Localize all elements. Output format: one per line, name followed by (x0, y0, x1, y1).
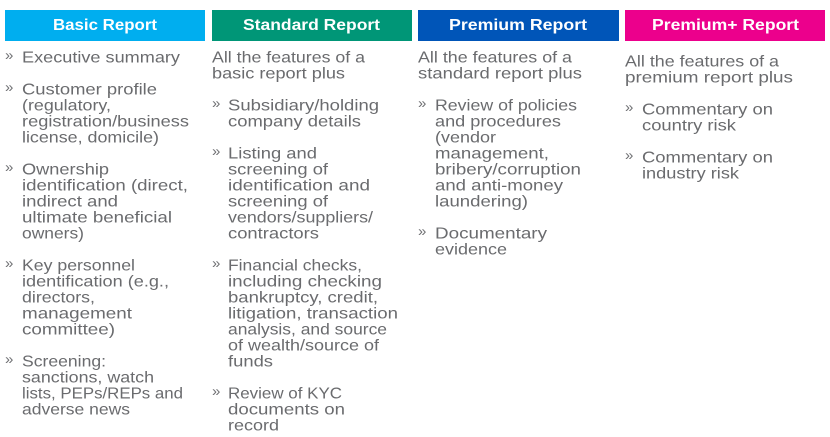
intro text: premium+: premium report plus (625, 69, 793, 86)
list item: review of KYC: documents on (228, 401, 345, 418)
list item: review of policies: and procedures (435, 113, 561, 130)
list item: listing and screening: contractors (228, 225, 319, 242)
list item: country risk: country risk (642, 117, 736, 134)
list item: documentary evidence: evidence (435, 241, 507, 258)
intro text: premium+: All the features of a (625, 53, 779, 70)
intro text: standard: basic report plus (212, 65, 345, 82)
list item: key personnel identification (5, 255, 169, 338)
list item: screening: adverse news (22, 401, 130, 418)
list item: ownership identification: owners) (22, 225, 84, 242)
intro text: premium+ (625, 53, 793, 86)
list item: listing and screening: identification and (228, 177, 370, 194)
list item: financial checks: analysis, and source (228, 321, 387, 338)
panel: basic report (5, 10, 205, 418)
list item: listing and screening: screening of (228, 193, 329, 210)
list item: review of policies: Review of policies (435, 97, 577, 114)
list item: review of policies: management, (435, 145, 549, 162)
list item: review of policies: laundering) (435, 193, 528, 210)
list item: customer profile: Customer profile (22, 81, 157, 98)
list item: review of policies: and anti-money (435, 177, 563, 194)
list item: review of policies: bribery/corruption (435, 161, 581, 178)
intro text: standard: All the features of a (212, 49, 365, 66)
list item: listing and screening: » (212, 143, 220, 160)
list item: customer profile (5, 79, 189, 146)
list item: ownership identification: indirect and (22, 193, 118, 210)
list item: screening: » (5, 351, 13, 368)
intro text: premium (418, 49, 582, 82)
list item: financial checks: Financial checks, (228, 257, 362, 274)
list item: review of policies: (vendor (435, 129, 496, 146)
list item: listing and screening: vendors/suppliers/ (228, 209, 374, 226)
list item: country risk: » (625, 99, 633, 116)
list item: financial checks (212, 255, 398, 370)
list item: key personnel identification: Key personnel (22, 257, 135, 274)
list item: country risk: Commentary on (642, 101, 773, 118)
heading: basic report: Basic Report (53, 17, 158, 34)
list item: listing and screening: screening of (228, 161, 329, 178)
list item: financial checks: of wealth/source of (228, 337, 380, 354)
list item: industry risk: industry risk (642, 165, 739, 182)
panel: premium+ report (625, 10, 825, 182)
list item: documentary evidence (418, 223, 547, 258)
list item: financial checks: » (212, 255, 220, 272)
list item: listing and screening (212, 143, 374, 242)
list item: financial checks: litigation, transaction (228, 305, 398, 322)
list item: review of policies: » (418, 95, 426, 112)
list item: financial checks: including checking (228, 273, 382, 290)
heading: standard report: Standard Report (243, 17, 381, 34)
heading: basic report (5, 10, 205, 41)
list item: key personnel identification: committee) (22, 321, 115, 338)
list item: executive summary: Executive summary (22, 49, 180, 66)
list item: review of policies (418, 95, 581, 210)
intro text: premium: standard report plus (418, 65, 582, 82)
list item: customer profile: » (5, 79, 13, 96)
list item: executive summary: » (5, 47, 13, 64)
list item: financial checks: funds (228, 353, 273, 370)
list item: ownership identification: » (5, 159, 13, 176)
list item: key personnel identification: management (22, 305, 133, 322)
panel: standard report (212, 10, 412, 434)
list item: review of KYC: record (228, 417, 279, 434)
list item: subsidiary details: company details (228, 113, 361, 130)
list item: ownership identification (5, 159, 188, 242)
list item: screening: Screening: (22, 353, 106, 370)
list item: subsidiary details (212, 95, 379, 130)
panel: premium report (418, 10, 619, 258)
intro text: standard (212, 49, 365, 82)
list item: ownership identification: identification (direct, (22, 177, 188, 194)
list item: subsidiary details: Subsidiary/holding (228, 97, 379, 114)
list item: industry risk (625, 147, 773, 182)
heading: premium report (418, 10, 619, 41)
list item: screening: lists, PEPs/REPs and (22, 385, 183, 402)
heading: premium report: Premium Report (449, 17, 588, 34)
heading: premium+ report (625, 10, 825, 41)
list item: documentary evidence: » (418, 223, 426, 240)
list item: subsidiary details: » (212, 95, 220, 112)
list item: review of KYC (212, 383, 345, 434)
list item: documentary evidence: Documentary (435, 225, 547, 242)
list item: customer profile: license, domicile) (22, 129, 159, 146)
list item: executive summary (5, 47, 180, 66)
list item: country risk (625, 99, 773, 134)
list item: key personnel identification: identification (e.g., (22, 273, 169, 290)
list item: review of KYC: » (212, 383, 220, 400)
list item: listing and screening: Listing and (228, 145, 317, 162)
list item: screening: sanctions, watch (22, 369, 154, 386)
intro text: premium: All the features of a (418, 49, 572, 66)
heading: standard report (212, 10, 412, 41)
list item: key personnel identification: directors, (22, 289, 95, 306)
list item: screening (5, 351, 183, 418)
list item: ownership identification: Ownership (22, 161, 109, 178)
heading: premium+ report: Premium+ Report (652, 17, 800, 34)
list item: industry risk: » (625, 147, 633, 164)
list item: ownership identification: ultimate beneficial (22, 209, 172, 226)
list item: financial checks: bankruptcy, credit, (228, 289, 378, 306)
list item: customer profile: registration/business (22, 113, 189, 130)
list item: review of KYC: Review of KYC (228, 385, 342, 402)
list item: key personnel identification: » (5, 255, 13, 272)
list item: customer profile: (regulatory, (22, 97, 111, 114)
list item: industry risk: Commentary on (642, 149, 773, 166)
